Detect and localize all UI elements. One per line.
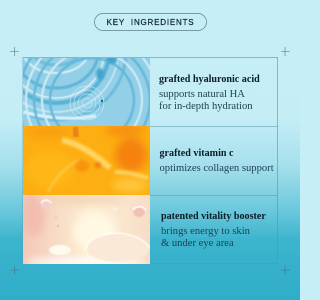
corner plus marks xyxy=(10,47,290,274)
ingredient 3 text: brings energy to skin xyxy=(161,226,251,237)
ingredient 2 text: grafted vitamin c xyxy=(160,148,234,159)
title pill xyxy=(94,14,206,30)
table frame xyxy=(23,58,278,264)
ingredient 3 text xyxy=(161,211,266,249)
ingredient 1 text: for in-depth hydration xyxy=(159,101,253,112)
title pill: KEY INGREDIENTS xyxy=(107,18,194,27)
image: orange vitamin c xyxy=(23,124,150,195)
ingredient 1 text xyxy=(159,74,260,112)
ingredient 1 text: grafted hyaluronic acid xyxy=(159,74,260,85)
image: water ripples xyxy=(23,58,150,126)
ingredient 2 text: optimizes collagen support xyxy=(160,163,274,174)
ingredient 3 text: & under eye area xyxy=(161,238,234,249)
ingredient 2 text xyxy=(160,148,274,174)
ingredient 1 text: supports natural HA xyxy=(159,89,245,100)
image: pink vitality booster xyxy=(21,193,150,266)
ingredient 3 text: patented vitality booster xyxy=(161,211,266,222)
